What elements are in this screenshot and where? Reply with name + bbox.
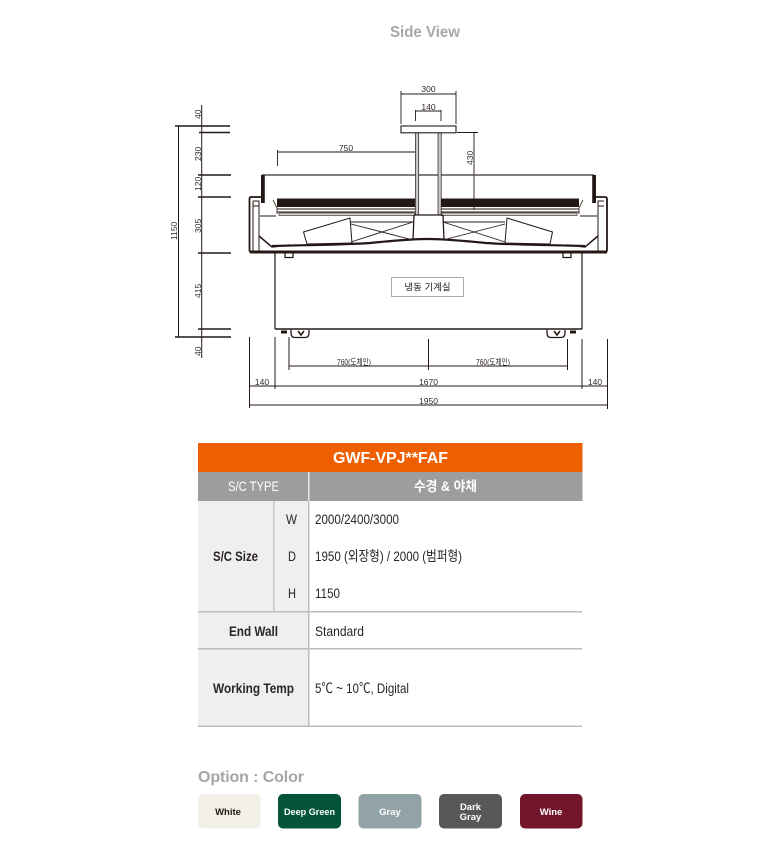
row: Working Temp: 5℃ ~ 10℃, Digital	[315, 680, 409, 696]
outer shell	[250, 197, 607, 252]
top dimensions: 430	[465, 151, 475, 165]
swatch: Dark Gray: Dark	[460, 802, 482, 813]
casters	[281, 330, 576, 338]
top dimensions	[278, 84, 478, 210]
row: End Wall: End Wall	[229, 623, 278, 639]
table header row: S/C TYPE	[228, 478, 279, 494]
swatch: Dark Gray	[439, 794, 502, 828]
top dimensions: 750	[339, 143, 353, 153]
table header row: 수경 & 야채	[414, 479, 477, 494]
base plate	[250, 250, 607, 254]
left height dimensions: 415	[193, 284, 203, 298]
table title bar: GWF-VPJ**FAF	[333, 450, 448, 467]
row: Working Temp	[213, 680, 409, 696]
label: machine room	[392, 278, 464, 296]
bottom dimensions: 1670	[419, 377, 438, 387]
spec table	[198, 443, 582, 727]
left height dimensions: 120	[193, 177, 203, 191]
swatch: Dark Gray: Gray	[460, 812, 482, 823]
swatch: Deep Green	[278, 794, 341, 828]
bottom dimensions: 140	[588, 377, 602, 387]
row: S/C Size: D	[288, 548, 296, 564]
row: S/C Size: 2000/2400/3000	[315, 511, 399, 527]
swatch: White: White	[215, 807, 241, 818]
top dimensions: 140	[421, 102, 436, 112]
bottom dimensions: 1950	[419, 396, 438, 406]
row: End Wall: Standard	[315, 623, 364, 639]
left height dimensions: 40	[193, 109, 203, 119]
row: Working Temp: Working Temp	[213, 680, 294, 696]
table header row	[198, 472, 582, 501]
row: End Wall	[229, 623, 364, 639]
top rail and side glass	[261, 175, 596, 203]
bottom dimensions: 140	[255, 377, 269, 387]
left height dimensions	[169, 105, 231, 358]
left height dimensions: 1150	[169, 221, 179, 240]
machine compartment	[275, 253, 582, 329]
bottom dimensions: 760(도체인)	[337, 357, 371, 367]
table backgrounds	[198, 472, 582, 727]
row: S/C Size: 1150	[315, 585, 340, 601]
refrigeration band	[277, 198, 579, 216]
title: Side View: Side View	[390, 24, 461, 41]
left height dimensions: 305	[193, 219, 203, 233]
upper brackets	[285, 253, 571, 258]
row: S/C Size: 1950 (외장형) / 2000 (범퍼형)	[315, 548, 462, 564]
row: S/C Size: H	[288, 585, 296, 601]
swatch: Wine	[520, 794, 582, 828]
bottom dimensions	[250, 337, 608, 409]
table title bar	[198, 443, 582, 472]
bottom dimensions: 760(도체인)	[476, 357, 510, 367]
centre post and cap	[401, 126, 456, 240]
swatch: Deep Green: Deep Green	[284, 807, 335, 818]
swatch: Wine: Wine	[540, 807, 562, 818]
row: S/C Size	[213, 511, 462, 601]
row: S/C Size: W	[286, 511, 298, 527]
swatch: Gray	[358, 794, 422, 828]
column divider	[308, 501, 310, 726]
technical drawing: side view	[169, 84, 608, 409]
swatch: White	[198, 794, 260, 828]
display case body	[250, 126, 607, 252]
heading: Option Color: Option : Color	[198, 769, 304, 786]
label: machine room: 냉동 기계실	[404, 282, 451, 294]
left height dimensions: 40	[193, 346, 203, 356]
colour swatches	[198, 794, 582, 828]
row: S/C Size: S/C Size	[213, 548, 258, 564]
display trays and cross frames	[272, 218, 585, 246]
left height dimensions: 230	[193, 147, 203, 161]
top dimensions: 300	[421, 84, 436, 94]
swatch: Gray: Gray	[379, 807, 402, 818]
